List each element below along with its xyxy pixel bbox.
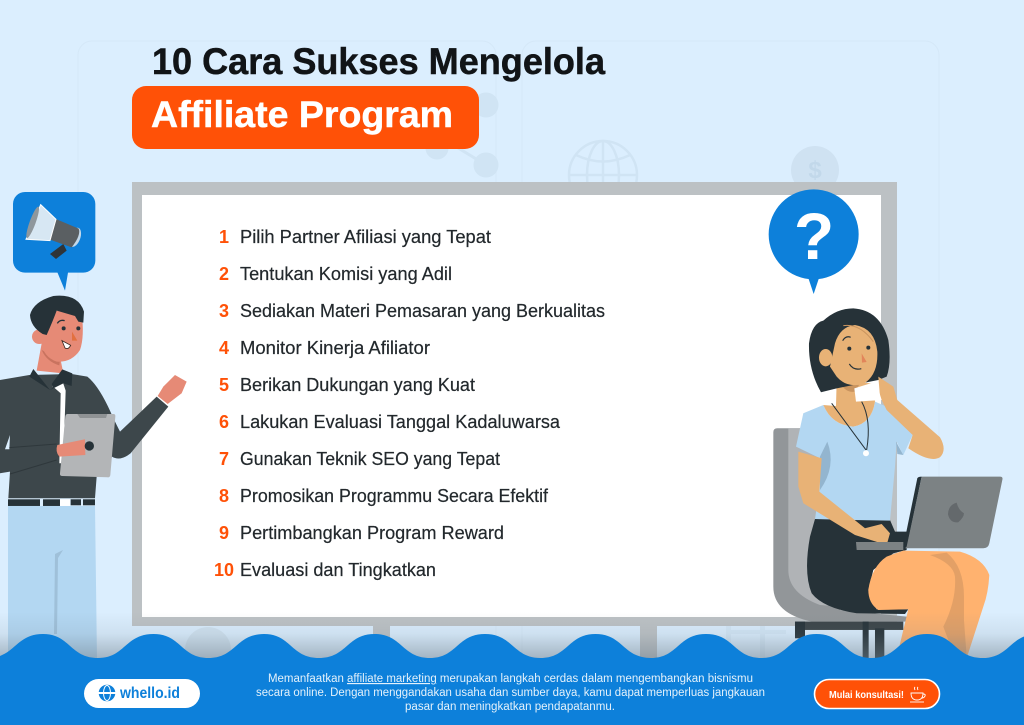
background: faint panels and icons: [78, 41, 939, 681]
man: torso and pointing arm: [0, 374, 168, 498]
woman: facial features: [843, 325, 873, 369]
item 1: Pilih Partner Afiliasi yang Tepat: [240, 227, 491, 247]
shadow gradient above footer: [0, 612, 1024, 660]
man with tablet illustration: [0, 192, 187, 660]
woman: left arm: [798, 452, 890, 545]
item 5: 5: [219, 375, 229, 395]
footer paragraph: [256, 673, 765, 713]
question mark: ?: [794, 199, 834, 273]
whello.id logo pill: whello.id: [119, 685, 180, 702]
man: jeans: [8, 506, 97, 660]
item 10: 10: [214, 560, 234, 580]
icon: globe: [98, 686, 116, 700]
background: faint panels and icons: $: [808, 157, 822, 184]
item 6: Lakukan Evaluasi Tanggal Kadaluwarsa: [240, 412, 561, 432]
woman: chair back and seat: [773, 428, 907, 622]
woman: paper card: [854, 382, 882, 402]
woman: laptop: [856, 477, 1003, 550]
item 8: Promosikan Programmu Secara Efektif: [240, 486, 549, 506]
consultation button: [814, 680, 940, 708]
whiteboard panel: [132, 182, 897, 626]
item 5: Berikan Dukungan yang Kuat: [240, 375, 475, 395]
woman: ear: [819, 349, 832, 366]
woman with laptop illustration: [769, 189, 1003, 662]
item 8: 8: [219, 486, 229, 506]
footer band with wave edge: [0, 634, 1024, 725]
item 9: Pertimbangkan Program Reward: [240, 523, 504, 543]
icon: coffee cup: [910, 687, 925, 702]
title line: 10 Cara Sukses Mengelola: [152, 41, 605, 82]
question mark bubble: [769, 189, 859, 294]
item 4: 4: [219, 338, 229, 358]
footer paragraph: Memanfaatkan affiliate marketing merupakan langkah cerdas dalam mengembangkan bisnismu: [268, 673, 753, 685]
item 2: Tentukan Komisi yang Adil: [240, 264, 452, 284]
woman: shirt: [796, 402, 913, 521]
man: collar and tie: [29, 369, 72, 463]
item 4: Monitor Kinerja Afiliator: [240, 338, 430, 358]
man: hair: [30, 296, 84, 335]
man: raised hand: [158, 375, 187, 404]
man: belt: [8, 499, 95, 506]
item 1: 1: [219, 227, 229, 247]
title highlight: Affiliate Program: Affiliate Program: [151, 94, 453, 135]
man: neck: [37, 343, 63, 373]
whello.id logo pill: [84, 679, 200, 708]
item 2: 2: [219, 264, 229, 284]
man: hand on tablet: [57, 439, 85, 457]
woman: orange legs: [868, 551, 989, 658]
numbered list: [214, 227, 605, 580]
man: tablet: [60, 414, 115, 477]
woman: neck: [823, 382, 875, 427]
item 3: Sediakan Materi Pemasaran yang Berkualitas: [240, 301, 605, 321]
item 7: 7: [219, 449, 229, 469]
item 9: 9: [219, 523, 229, 543]
man: ear: [32, 329, 47, 344]
footer paragraph: secara online. Dengan menggandakan usaha dan sumber daya, kamu dapat memperluas jangkauan: [256, 687, 765, 699]
consultation button: Mulai konsultasi!: [829, 690, 904, 701]
item 7: Gunakan Teknik SEO yang Tepat: [240, 449, 500, 469]
woman: necklace: [832, 402, 869, 456]
item 3: 3: [219, 301, 229, 321]
footer paragraph: pasar dan meningkatkan pendapatanmu.: [405, 701, 615, 713]
woman: hair back: [809, 308, 890, 392]
title highlight: Affiliate Program: [132, 86, 479, 149]
item 10: Evaluasi dan Tingkatkan: [240, 560, 436, 580]
woman: chair legs: [795, 622, 903, 662]
man: eyes, brow and smile: [57, 320, 80, 349]
item 6: 6: [219, 412, 229, 432]
woman: face: [830, 325, 877, 385]
woman: right arm and hand: [878, 377, 944, 459]
woman: skirt: [807, 519, 908, 614]
man: face: [42, 311, 83, 362]
speech bubble with megaphone: [13, 192, 95, 291]
